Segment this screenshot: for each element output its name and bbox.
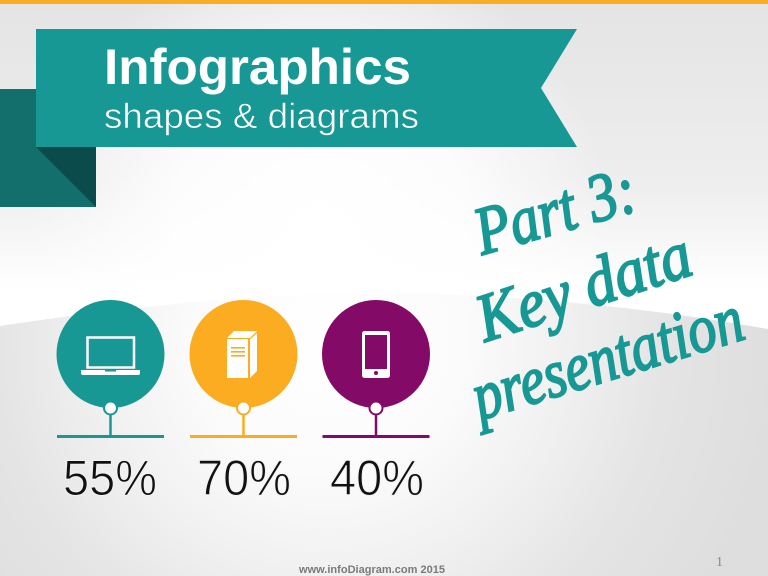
ribbon fold back	[0, 89, 96, 207]
icon: smartphone	[362, 331, 390, 378]
value: 70%	[197, 450, 291, 506]
value: 40%	[330, 450, 424, 506]
ribbon front	[36, 29, 577, 147]
script heading: part 3 key data presentation	[459, 151, 752, 435]
connector	[375, 414, 377, 436]
data item: phone 40%	[322, 300, 430, 506]
title: Infographics	[104, 39, 411, 95]
orange circle	[190, 300, 298, 408]
value: 55%	[63, 450, 157, 506]
ribbon banner	[0, 29, 577, 207]
data item: laptop 55%	[56, 300, 164, 506]
page number: 1	[716, 555, 723, 570]
icon: server tower	[227, 331, 257, 378]
connector	[109, 414, 112, 436]
icon: laptop	[81, 338, 140, 375]
line: Part 3: Part 3:	[464, 151, 645, 270]
connector	[242, 414, 245, 436]
line: Key data: Key data	[465, 215, 701, 357]
top accent bar	[0, 0, 768, 4]
teal circle	[56, 300, 164, 408]
purple circle	[322, 300, 430, 408]
footer url: www.infoDiagram.com 2015	[298, 564, 445, 576]
subtitle: shapes & diagrams	[104, 97, 419, 136]
data item: server 70%	[190, 300, 298, 506]
ribbon fold shadow	[36, 147, 96, 207]
